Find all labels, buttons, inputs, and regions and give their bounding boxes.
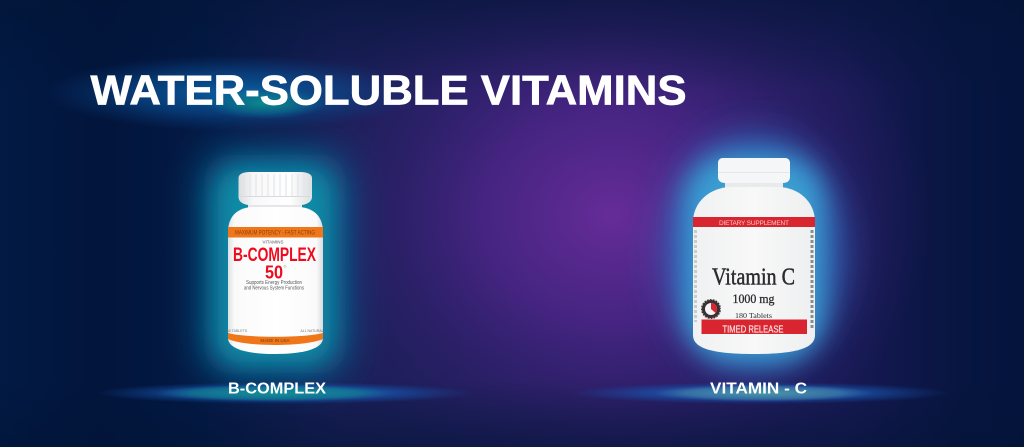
product: B-Complex bottle bbox=[227, 172, 324, 354]
bottle body bbox=[228, 207, 323, 354]
product label text: 50 TABLETS bbox=[227, 329, 248, 333]
orange top band bbox=[228, 227, 323, 238]
side label print bbox=[696, 230, 812, 330]
product label text: 1000 mg bbox=[732, 291, 775, 306]
product label text: Vitamin C bbox=[712, 264, 795, 290]
product label text: 50 bbox=[265, 262, 283, 282]
orange bottom band bbox=[228, 333, 323, 345]
red top band: DIETARY SUPPLEMENT bbox=[719, 220, 789, 227]
product label text: B-COMPLEX bbox=[233, 244, 316, 266]
title glow bbox=[45, 55, 425, 131]
product label text: Supports Energy Production bbox=[246, 280, 302, 286]
product label text: ALL NATURAL bbox=[300, 329, 324, 333]
product: Vitamin C bottle bbox=[693, 158, 815, 354]
product label text: VITAMINS bbox=[263, 240, 283, 244]
glow: B-Complex bottle bbox=[205, 155, 345, 373]
floor light: Vitamin C bbox=[570, 382, 950, 404]
bottle cap bbox=[718, 158, 790, 190]
orange top band: MAXIMUM POTENCY - FAST ACTING bbox=[235, 230, 315, 236]
label: Vitamin - C: VITAMIN - C bbox=[710, 380, 807, 398]
timed release band bbox=[702, 320, 807, 336]
red top band bbox=[693, 217, 815, 227]
product label text bbox=[712, 264, 795, 320]
glow: Vitamin C bottle bbox=[667, 136, 843, 368]
product label text bbox=[227, 240, 324, 333]
product label text: and Nervous System Functions bbox=[244, 286, 304, 292]
title: WATER-SOLUBLE VITAMINS bbox=[90, 66, 686, 114]
bottle cap bbox=[238, 172, 312, 209]
product label text: 180 Tablets bbox=[735, 311, 772, 320]
label: B-Complex: B-COMPLEX bbox=[228, 380, 326, 398]
bottle body bbox=[693, 187, 815, 354]
orange bottom band: MADE IN USA bbox=[260, 338, 290, 343]
clock badge bbox=[701, 299, 721, 319]
product label text: ® bbox=[284, 264, 287, 269]
floor light: B-Complex bbox=[95, 382, 475, 404]
timed release band: TIMED RELEASE bbox=[722, 324, 784, 336]
